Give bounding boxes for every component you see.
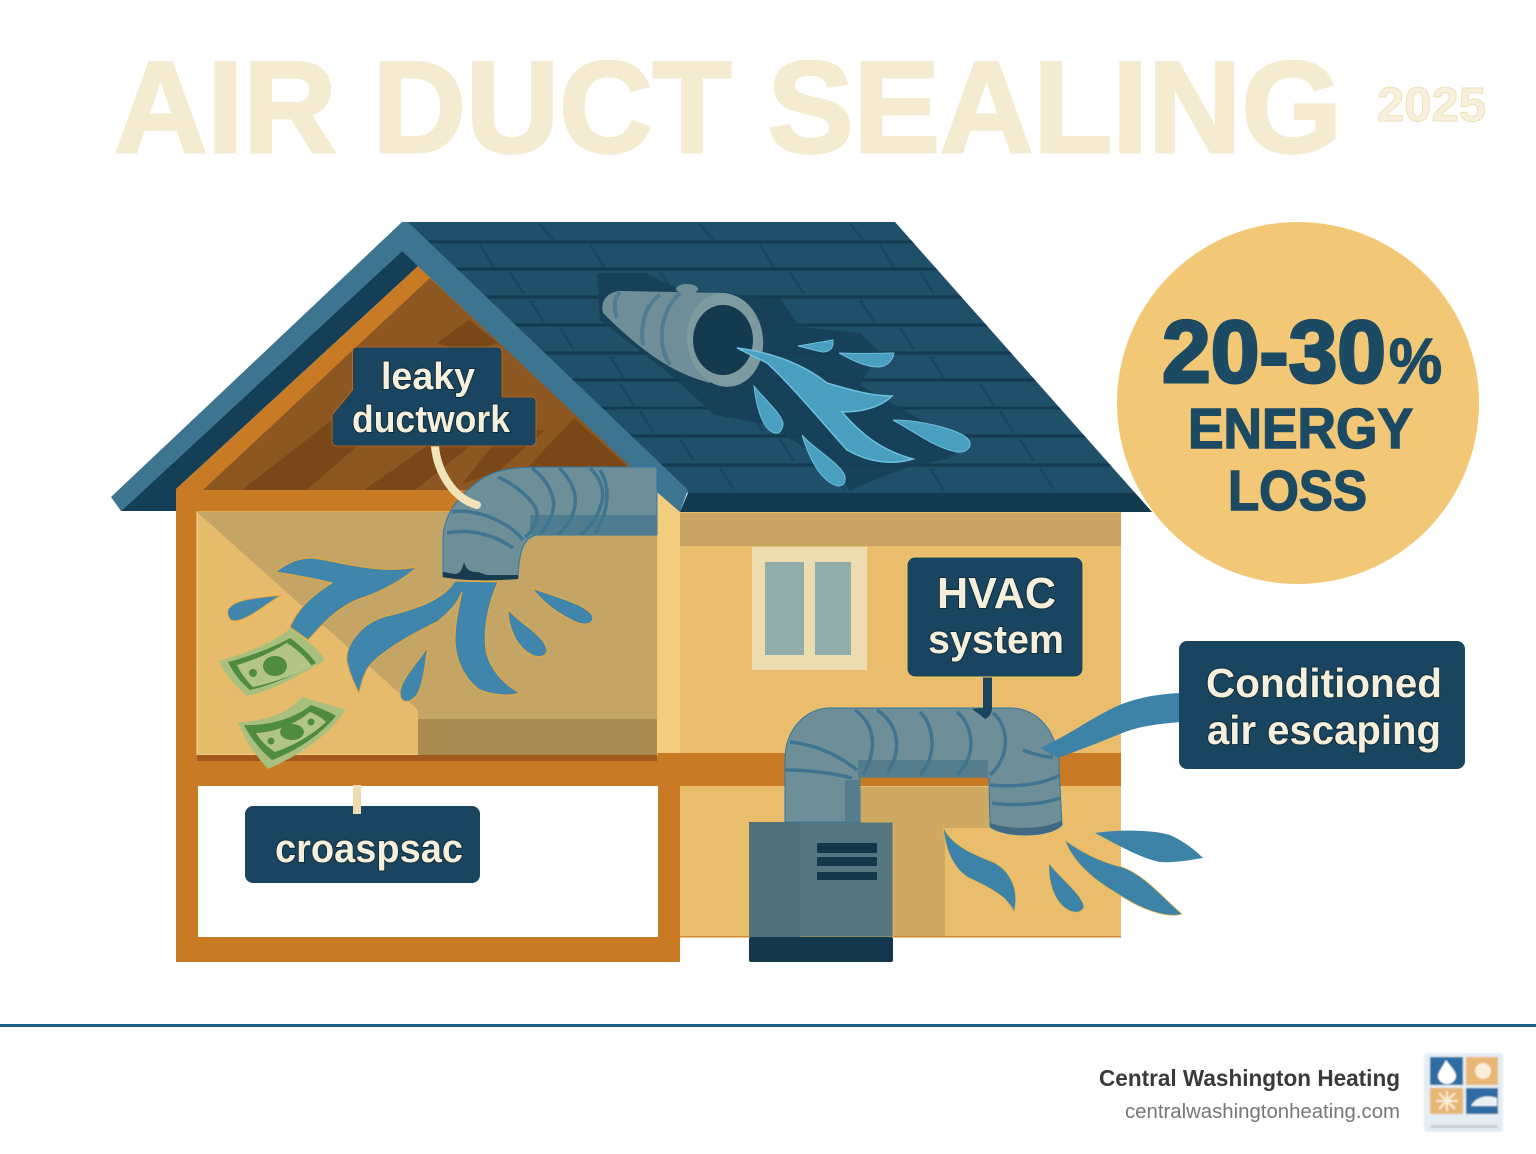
leader: leaky ductwork xyxy=(435,446,477,505)
furnace unit xyxy=(749,822,893,962)
stat circle: ENERGY xyxy=(1188,397,1413,461)
label: crawlspace xyxy=(245,785,480,883)
vents xyxy=(817,843,877,853)
label: conditioned air escaping xyxy=(1179,641,1465,769)
stat circle: % xyxy=(1389,325,1442,397)
bill 2 xyxy=(238,697,345,769)
attic xyxy=(203,278,632,490)
label: conditioned air escaping: Conditioned xyxy=(1206,660,1442,706)
stat circle: LOSS xyxy=(1228,459,1367,523)
lower air plumes xyxy=(943,826,1203,915)
label: leaky ductwork: leaky xyxy=(381,356,475,398)
roof xyxy=(400,222,1160,513)
lower duct xyxy=(785,708,1062,840)
window xyxy=(752,547,867,670)
year: 2025 xyxy=(1377,79,1486,132)
bill 1 xyxy=(219,628,325,696)
stat circle: 20-30 xyxy=(1162,302,1386,401)
roof duct leak xyxy=(602,284,970,486)
left leaking duct xyxy=(443,467,660,580)
label: conditioned air escaping: air escaping xyxy=(1207,707,1441,753)
title: AIR DUCT SEALING xyxy=(114,34,1342,180)
wall frame xyxy=(176,260,680,962)
label: HVAC system: system xyxy=(928,618,1064,662)
right wall xyxy=(657,492,1121,938)
label: leaky ductwork xyxy=(332,347,536,446)
label: leaky ductwork: ductwork xyxy=(352,399,511,441)
footer url: centralwashingtonheating.com xyxy=(1125,1101,1400,1123)
crawlspace opening xyxy=(198,786,658,937)
label: HVAC system: HVAC xyxy=(937,569,1056,618)
house illustration xyxy=(111,222,1465,962)
left air plumes xyxy=(228,558,593,701)
footer company name: Central Washington Heating xyxy=(1099,1065,1400,1091)
stat circle xyxy=(1117,222,1479,584)
label: HVAC system xyxy=(907,557,1083,719)
footer logo xyxy=(1424,1053,1503,1132)
barge boards xyxy=(111,222,688,512)
footer divider xyxy=(0,1024,1536,1027)
money bills xyxy=(219,628,345,769)
left room xyxy=(197,512,657,761)
conditioned air stream xyxy=(1040,693,1180,758)
label: crawlspace: croaspsac xyxy=(275,827,463,871)
